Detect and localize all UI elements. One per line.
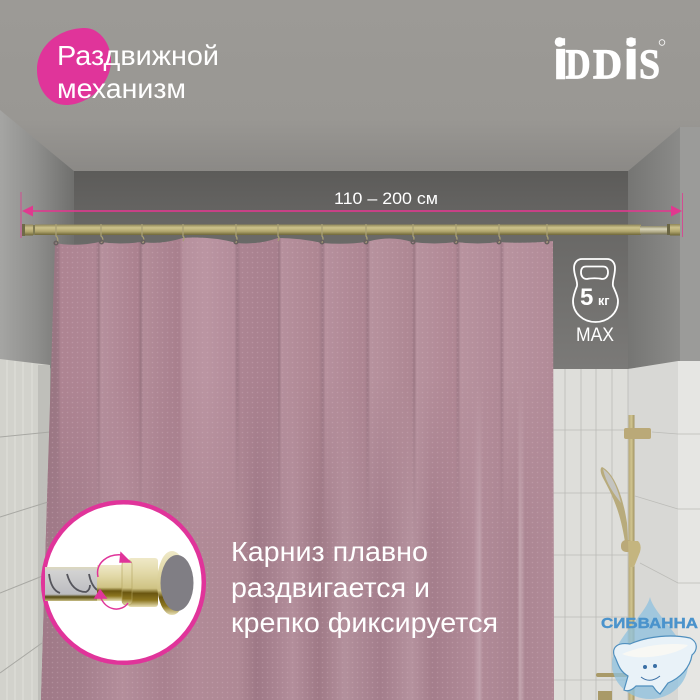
logo iddis: D: [566, 42, 590, 88]
logo iddis: D: [593, 42, 622, 88]
back wall: [74, 171, 628, 370]
watermark: sibvanna: СИБВАННА: [601, 615, 698, 632]
logo iddis: S: [639, 42, 660, 88]
description text: раздвигается и: [231, 572, 430, 603]
gold sleeve: [97, 565, 129, 601]
dimension label: 110 – 200 см: [334, 189, 438, 208]
description text: [231, 536, 498, 638]
right side wall: [628, 127, 700, 369]
dimension arrow: [20, 192, 683, 238]
rotation arrows: [95, 553, 130, 609]
icon: kettlebell 5 kg max: кг: [598, 294, 609, 308]
inset circle: mechanism detail: [43, 502, 204, 663]
curtain rod: [22, 224, 680, 236]
heading: Раздвижной: [57, 40, 219, 71]
icon: kettlebell 5 kg max: 5: [580, 284, 593, 311]
pink blob: [37, 28, 111, 105]
end cap: [157, 551, 194, 615]
heading: механизм: [57, 73, 186, 104]
logo iddis: [553, 28, 665, 90]
icon: kettlebell 5 kg max: MAX: [576, 324, 614, 346]
curtain rings: [54, 224, 549, 245]
logo iddis: i: [624, 28, 639, 90]
gold collar: [128, 558, 158, 607]
curtain: [40, 230, 556, 700]
watermark: sibvanna: [601, 597, 698, 699]
heading: [57, 40, 219, 104]
logo iddis: i: [553, 28, 568, 90]
ceiling: [0, 0, 700, 171]
shower set: [596, 415, 651, 700]
inner rod tube: [45, 567, 100, 601]
description text: Карниз плавно: [231, 536, 428, 567]
left wall tiles: [0, 359, 50, 700]
icon: kettlebell 5 kg max: [573, 259, 618, 346]
left side wall: [0, 110, 74, 372]
right wall tiles: [553, 361, 700, 700]
description text: крепко фиксируется: [231, 607, 498, 638]
